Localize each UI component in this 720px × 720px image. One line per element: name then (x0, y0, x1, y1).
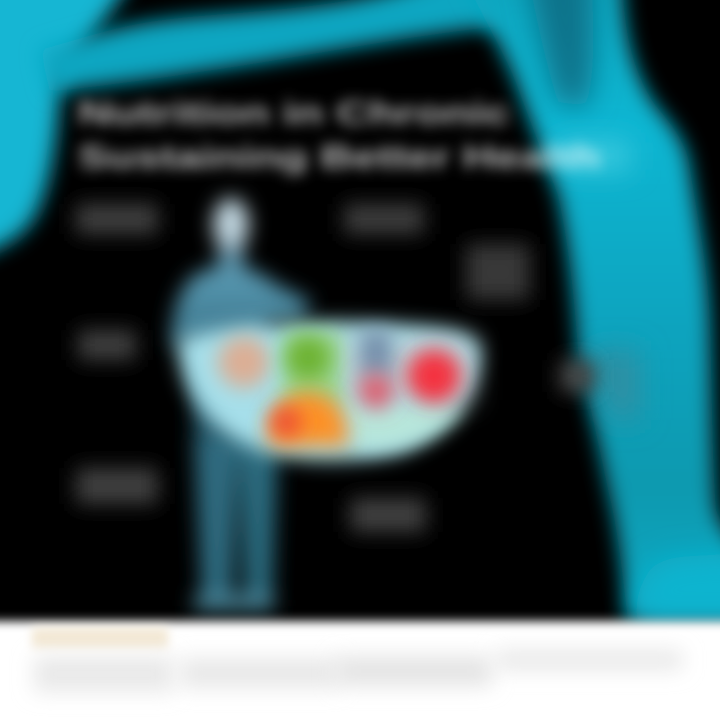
food: salmon (268, 392, 348, 446)
footer paragraph right column (496, 650, 682, 670)
footer highlight tag (32, 628, 168, 648)
footer paragraph right center column (336, 656, 492, 686)
food: greens (286, 336, 330, 380)
leg: darker thigh fold (525, 0, 593, 108)
plate highlight (345, 405, 465, 448)
food: small red item (358, 373, 394, 409)
plate (178, 323, 479, 460)
illustration: human figure (172, 198, 312, 610)
food: orange slice (218, 336, 270, 388)
title: Nutrition in Chronic (78, 95, 510, 131)
text block: upper left label (76, 204, 158, 234)
text block: upper center label (344, 204, 424, 234)
text block: middle left label (78, 330, 136, 360)
text block: upper right label (466, 244, 530, 300)
footer paragraph center column (180, 658, 340, 688)
leg: lit knee (555, 142, 630, 170)
food: grey blue item (360, 330, 392, 378)
food: tomato (407, 349, 461, 403)
footer panel (0, 621, 720, 720)
illustration: plate of foods (178, 323, 479, 460)
leg: thigh, knee and shin (455, 0, 720, 620)
plate pale centre (330, 340, 470, 400)
text block: lower left label (76, 468, 158, 504)
arm: horizontal band (40, 0, 520, 92)
arm: left shoulder (0, 0, 140, 262)
leg: dim panel on shin (590, 350, 640, 420)
text block: lower center label (350, 498, 426, 532)
text block: right label on leg (560, 360, 596, 392)
title: Sustaining Better Health (78, 139, 600, 175)
title (78, 95, 600, 175)
food: red edge of salmon (271, 407, 301, 437)
leg: lit foot (635, 550, 720, 620)
footer base (0, 636, 720, 720)
footer paragraph left column (34, 656, 174, 692)
food: greens halo (284, 332, 340, 412)
